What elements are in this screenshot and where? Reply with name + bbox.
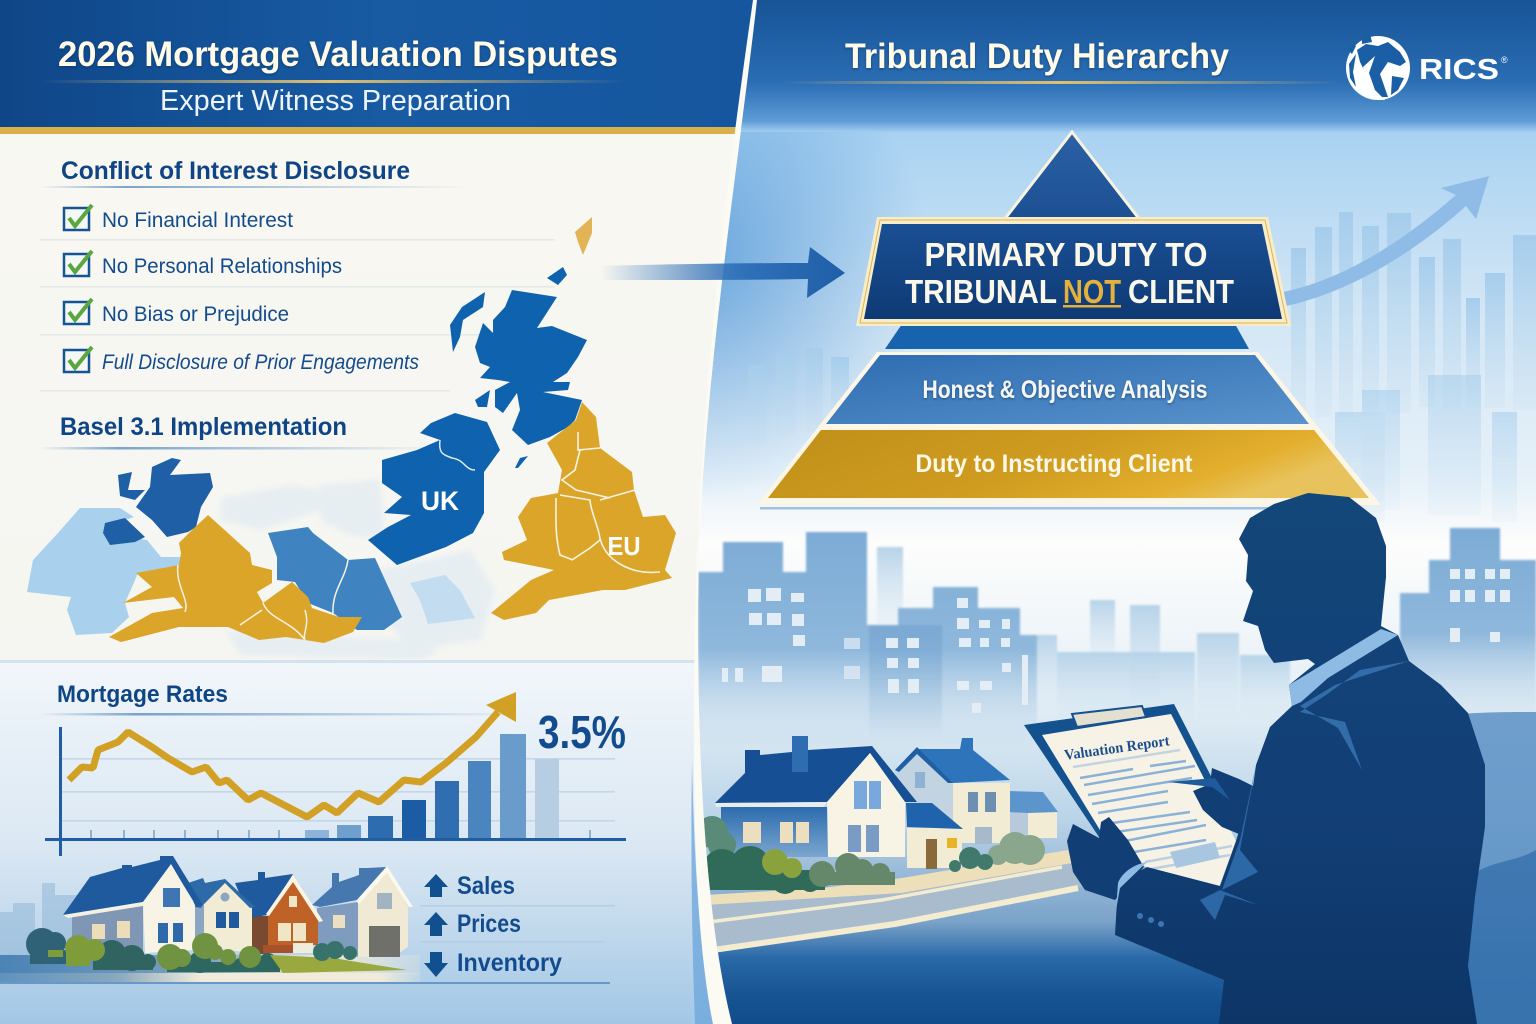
- hands: [1193, 768, 1253, 834]
- pyramid outline: [757, 352, 1381, 505]
- item: full disclosure: Full Disclosure of Prior Engagements: [102, 351, 419, 374]
- tier: honest and objective analysis: Honest & Objective Analysis: [922, 376, 1208, 404]
- arrow: rising trend: [1283, 176, 1489, 306]
- heading: tribunal duty hierarchy: Tribunal Duty Hierarchy: [845, 37, 1230, 76]
- house one: [72, 905, 143, 953]
- indicator: inventory down: Inventory: [457, 949, 562, 977]
- region: Ireland: [368, 413, 500, 565]
- heading: conflict of interest disclosure: Conflict of Interest Disclosure: [61, 157, 410, 185]
- tier: primary duty box: PRIMARY DUTY TO: [924, 236, 1208, 273]
- subtitle: Expert Witness Preparation: [160, 85, 511, 117]
- indicator: sales up: [424, 872, 515, 900]
- tier: primary duty box: NOT: [1063, 273, 1121, 310]
- house two: [195, 905, 205, 945]
- main house: [721, 807, 828, 857]
- arrow: map to primary duty: [600, 247, 845, 298]
- tier: primary duty box: CLIENT: [1128, 273, 1234, 310]
- shrubs: [26, 928, 66, 964]
- map: small comparison map: [27, 447, 495, 660]
- region: England and Wales: [491, 402, 676, 620]
- tier: primary duty box: [856, 217, 1291, 326]
- item: no personal relationships: No Personal Relationships: [102, 255, 342, 278]
- house four: [317, 902, 358, 957]
- house three: [250, 916, 268, 954]
- tier: duty to instructing client: Duty to Instructing Client: [916, 450, 1193, 478]
- gold trend line and arrow: [69, 692, 516, 817]
- body and head: [1115, 493, 1485, 1024]
- far house: [1028, 812, 1057, 838]
- background skyline upper: [808, 212, 1536, 510]
- tier: apex: [1004, 132, 1140, 220]
- tier: duty to instructing client: [760, 430, 1369, 510]
- heading: mortgage rates: Mortgage Rates: [57, 681, 228, 708]
- heading: main title: [40, 35, 625, 117]
- item: no bias or prejudice: No Bias or Prejudice: [102, 303, 289, 326]
- second house: [895, 749, 953, 830]
- indicator: prices up: [424, 910, 521, 938]
- tier: honest and objective analysis: [826, 355, 1309, 424]
- heading: basel 3.1 implementation: Basel 3.1 Implementation: [60, 413, 347, 441]
- illustration: neighbourhood houses: [0, 856, 610, 984]
- shrubs: [988, 832, 1045, 865]
- panel: right background: [690, 0, 1536, 1024]
- label: EU: EU: [608, 531, 640, 561]
- checklist: disclosures: [40, 186, 555, 392]
- lower skyline: [698, 528, 1536, 745]
- item: no bias or prejudice: [64, 299, 289, 326]
- clipboard: Valuation Report: [1063, 733, 1171, 764]
- logo: RICS: [1346, 34, 1508, 100]
- heading: main title: 2026 Mortgage Valuation Disputes: [58, 35, 618, 74]
- tier: base band: [885, 324, 1249, 349]
- coat highlights: [1300, 661, 1409, 770]
- bars: [305, 734, 559, 839]
- item: no financial interest: No Financial Interest: [102, 209, 293, 232]
- indicator: sales up: Sales: [457, 872, 515, 900]
- indicators: sales prices inventory: [420, 872, 615, 977]
- heading: tribunal duty hierarchy: [780, 37, 1340, 84]
- garage wing: [907, 828, 962, 868]
- indicator: prices up: Prices: [457, 910, 521, 938]
- chart: mortgage rates: [40, 692, 626, 856]
- road: [705, 850, 1090, 950]
- map: UK and EU large map: [368, 217, 676, 620]
- figure: expert witness silhouette: [1024, 493, 1485, 1024]
- tier: primary duty box: TRIBUNAL: [905, 273, 1057, 310]
- region: Scotland: [475, 290, 587, 445]
- shirt collar: [1289, 629, 1398, 706]
- value: 3.5%: 3.5%: [538, 706, 626, 758]
- logo: RICS: ®: [1501, 55, 1508, 65]
- label: UK: UK: [421, 486, 459, 516]
- pyramid: tribunal duty hierarchy: [757, 132, 1381, 510]
- right houses: [696, 736, 1058, 894]
- clipboard: [1024, 704, 1236, 890]
- left panel background: [0, 0, 760, 1024]
- logo: RICS: RICS: [1419, 54, 1499, 86]
- right dark hill: [1468, 712, 1536, 1024]
- divider curve: [691, 0, 757, 1024]
